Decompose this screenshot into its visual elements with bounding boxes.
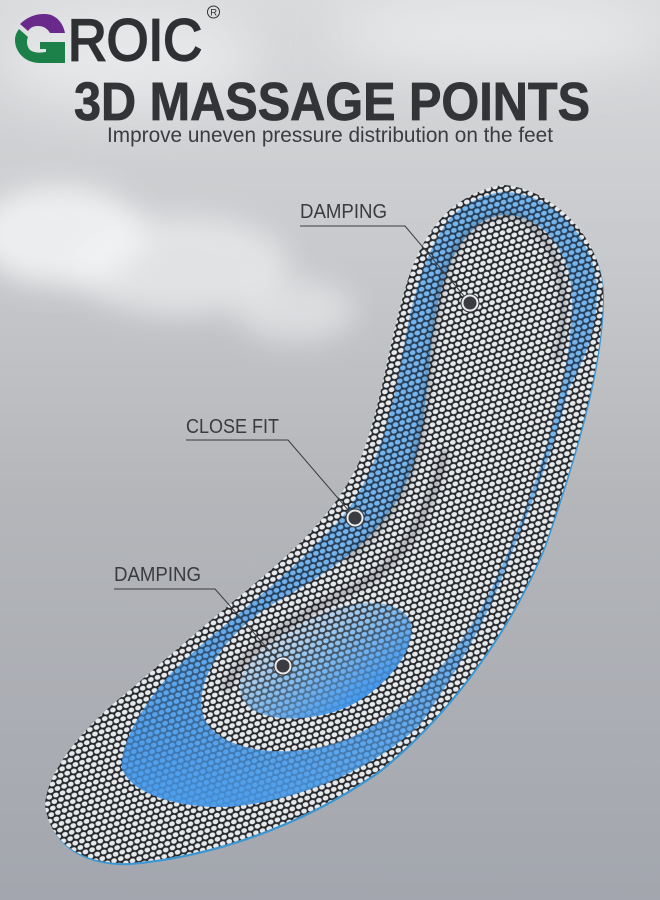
subtitle: Improve uneven pressure distribution on the feet	[107, 124, 553, 147]
registered mark	[208, 6, 220, 18]
callout: damping forefoot: DAMPING	[114, 564, 201, 586]
callout: damping top: DAMPING	[300, 201, 387, 223]
insole base mesh	[45, 185, 603, 863]
insole blue edge	[46, 187, 604, 865]
title: 3D MASSAGE POINTS	[74, 72, 590, 132]
logo G green arc	[15, 29, 65, 63]
callout: close fit: CLOSE FIT	[186, 416, 279, 438]
clouds	[0, 0, 660, 342]
forefoot ridge shadow	[225, 450, 445, 690]
registered mark: R	[210, 8, 217, 18]
logo G purple arc	[20, 14, 65, 33]
callout: close fit	[186, 416, 364, 527]
logo	[15, 6, 220, 73]
insole	[45, 185, 604, 865]
blue forefoot pad	[240, 603, 412, 718]
callout: damping forefoot	[114, 564, 292, 675]
logo wordmark: ROIC	[68, 8, 202, 73]
central mesh zone	[202, 215, 572, 751]
blue cushion zone	[122, 192, 597, 807]
heel ridge shadow	[345, 215, 563, 560]
callout: damping top	[300, 201, 479, 312]
